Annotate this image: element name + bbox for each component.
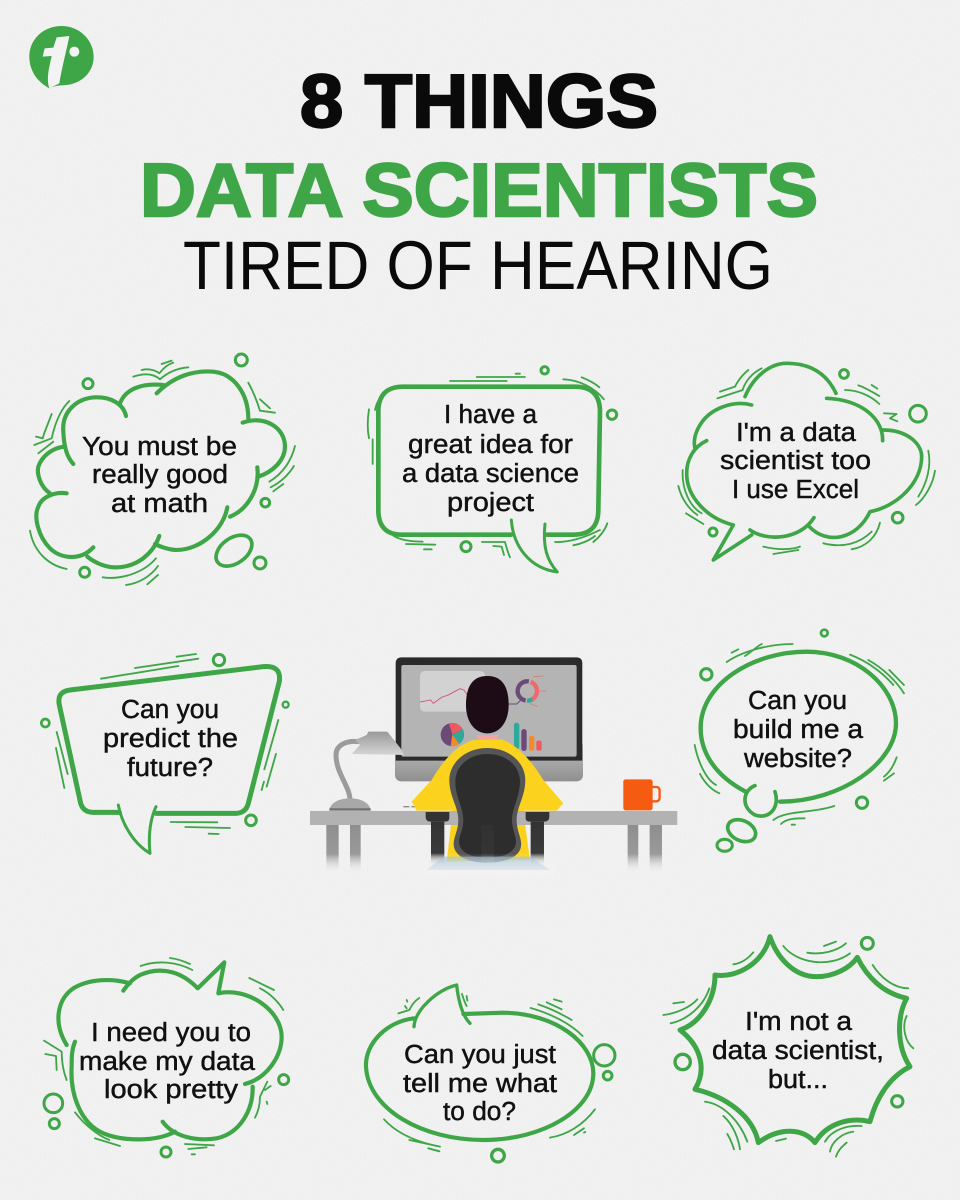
speech bubble: Can you predict the future?: Can you xyxy=(121,696,219,724)
speech bubble: You must be really good at math: at math xyxy=(111,490,208,518)
speech bubble: I have a great idea for a data science project: project xyxy=(447,489,534,517)
lamp xyxy=(329,732,404,811)
speech bubble: I'm a data scientist too I use Excel: I use Excel xyxy=(732,476,859,504)
speech bubble: I need you to make my data look pretty: look pretty xyxy=(104,1076,238,1104)
title: TIRED OF HEARING xyxy=(183,227,773,304)
desk xyxy=(310,811,677,873)
illustration: person at desk xyxy=(310,657,677,877)
person xyxy=(403,676,563,862)
logo xyxy=(29,26,94,88)
speech bubble: I'm not a data scientist, but... xyxy=(663,937,913,1157)
speech bubble: I need you to make my data look pretty: I need you to xyxy=(91,1019,251,1047)
speech bubble: Can you predict the future?: future? xyxy=(127,754,213,782)
speech bubble: You must be really good at math: You must be xyxy=(82,433,237,461)
speech bubble: I'm not a data scientist, but...: I'm not a xyxy=(745,1008,853,1036)
chair xyxy=(423,748,553,877)
speech bubble: I'm a data scientist too I use Excel: I'm a data xyxy=(736,419,857,447)
icon: orange mug xyxy=(623,779,660,810)
speech bubble: I need you to make my data look pretty: make my data xyxy=(79,1048,256,1076)
speech bubble: I have a great idea for a data science project: great idea for xyxy=(408,431,574,459)
speech bubble: Can you just tell me what to do? xyxy=(366,985,615,1162)
speech bubble: I'm a data scientist too I use Excel xyxy=(678,363,935,560)
speech bubble: You must be really good at math xyxy=(30,354,295,585)
speech bubble: Can you build me a website?: build me a xyxy=(733,716,864,744)
speech bubble: I have a great idea for a data science project: I have a xyxy=(444,401,538,429)
title: 8 THINGS xyxy=(300,59,658,143)
title: DATA SCIENTISTS xyxy=(140,148,818,232)
speech bubble: I'm a data scientist too I use Excel: scientist too xyxy=(720,447,871,475)
speech bubble: You must be really good at math: really good xyxy=(92,461,228,489)
speech bubble: I'm not a data scientist, but...: data scientist, xyxy=(712,1037,884,1065)
title xyxy=(140,59,818,304)
speech bubble: Can you just tell me what to do?: Can you just xyxy=(404,1041,556,1069)
speech bubble: I need you to make my data look pretty xyxy=(44,958,289,1157)
speech bubble: I'm not a data scientist, but...: but... xyxy=(768,1066,828,1094)
speech bubble: Can you just tell me what to do?: tell me what xyxy=(403,1070,557,1098)
monitor xyxy=(395,657,583,781)
speech bubble: Can you predict the future?: predict the xyxy=(103,725,238,753)
speech bubble: Can you build me a website? xyxy=(695,630,904,851)
speech bubble: Can you build me a website?: website? xyxy=(743,745,852,773)
speech bubble: Can you just tell me what to do?: to do? xyxy=(443,1098,516,1126)
speech bubble: Can you predict the future? xyxy=(41,654,289,853)
speech bubble: I have a great idea for a data science project xyxy=(368,367,617,572)
speech bubble: I have a great idea for a data science project: a data science xyxy=(402,460,579,488)
speech bubble: Can you build me a website?: Can you xyxy=(748,687,847,715)
